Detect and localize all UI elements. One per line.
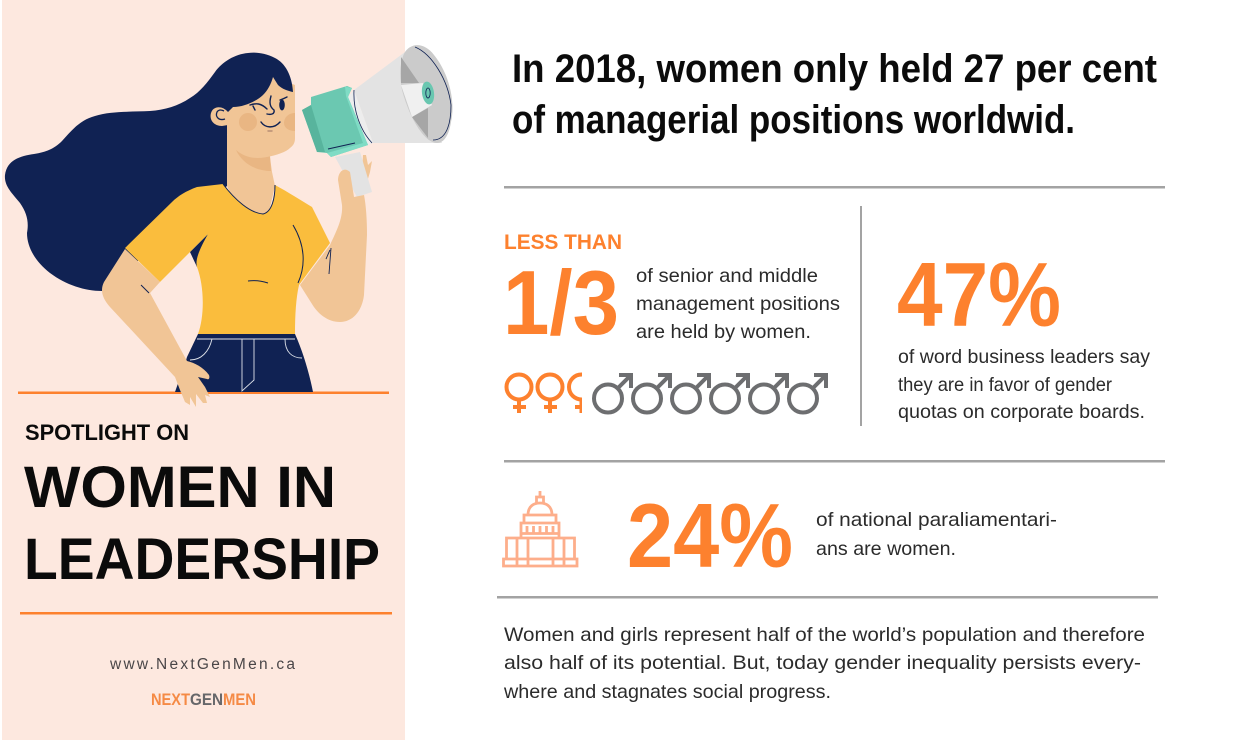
left arm and hand	[102, 249, 210, 407]
megaphone teal body	[302, 86, 368, 157]
trousers	[175, 334, 313, 392]
icons: female symbols	[506, 374, 594, 413]
wink, eye, nose, smile	[250, 96, 287, 131]
icon: capitol building	[504, 491, 577, 566]
description: senior and middle management: are held by women.	[636, 321, 811, 343]
heading: women in leadership	[24, 455, 380, 592]
description: business leaders	[898, 346, 1150, 423]
heading: spotlight on: SPOTLIGHT ON	[25, 420, 189, 445]
description: parliamentarians: ans are women.	[816, 538, 956, 560]
orange rule upper	[18, 392, 389, 394]
closing paragraph: Women and girls represent half of the world’s population and therefore	[504, 624, 1145, 646]
cheeks	[239, 113, 257, 131]
megaphone disc	[400, 45, 452, 143]
neck	[227, 135, 275, 216]
figure: 1/3: 1/3	[503, 253, 619, 354]
main heading	[512, 47, 1157, 142]
figure: 47%: 47%	[897, 245, 1061, 346]
heading: women in leadership: WOMEN IN	[24, 455, 336, 520]
megaphone ring	[348, 90, 373, 145]
ear	[211, 107, 228, 126]
description: senior and middle management	[636, 265, 840, 343]
flowing hair	[5, 53, 293, 291]
website url: www.NextGenMen.ca	[109, 656, 296, 673]
closing paragraph: also half of its potential. But, today gender inequality persists every-	[504, 652, 1141, 674]
neck shadow	[236, 150, 271, 171]
panel: left sidebar background	[2, 0, 405, 740]
closing paragraph: where and stagnates social progress.	[503, 681, 831, 703]
heading: women in leadership: LEADERSHIP	[24, 527, 380, 592]
illustration: woman with megaphone	[5, 45, 452, 407]
stat: less than one third	[503, 231, 840, 413]
description: business leaders: of word business leaders say	[898, 346, 1150, 368]
description: business leaders: quotas on corporate boards.	[898, 401, 1145, 423]
description: business leaders: they are in favor of gender	[898, 374, 1112, 396]
stat: 24 percent	[504, 486, 1057, 587]
shirt	[125, 184, 330, 334]
logo: NextGenMen: GEN	[190, 690, 223, 709]
logo: NextGenMen: MEN	[223, 690, 256, 709]
stat: 47 percent	[897, 245, 1150, 423]
face	[226, 75, 295, 157]
icons: male symbols	[594, 375, 826, 412]
description: senior and middle management: of senior and middle	[636, 265, 818, 287]
closing paragraph	[503, 624, 1145, 703]
description: parliamentarians: of national paraliamentari-	[816, 509, 1057, 531]
megaphone handle	[335, 152, 372, 197]
orange rule lower	[20, 612, 392, 614]
main heading: of managerial positions worldwid.	[512, 98, 1075, 142]
back fingers	[362, 155, 372, 182]
figure: 24%: 24%	[627, 486, 793, 587]
main heading: In 2018, women only held 27 per cent	[512, 47, 1157, 91]
right arm and hand	[300, 170, 367, 322]
description: senior and middle management: management positions	[636, 293, 840, 315]
logo: NextGenMen: NEXT	[151, 690, 191, 709]
description: parliamentarians	[816, 509, 1057, 560]
hair gap under arm	[190, 234, 208, 267]
label: less than: LESS THAN	[504, 231, 622, 254]
megaphone cone	[354, 52, 442, 143]
logo: NextGenMen	[151, 690, 256, 709]
